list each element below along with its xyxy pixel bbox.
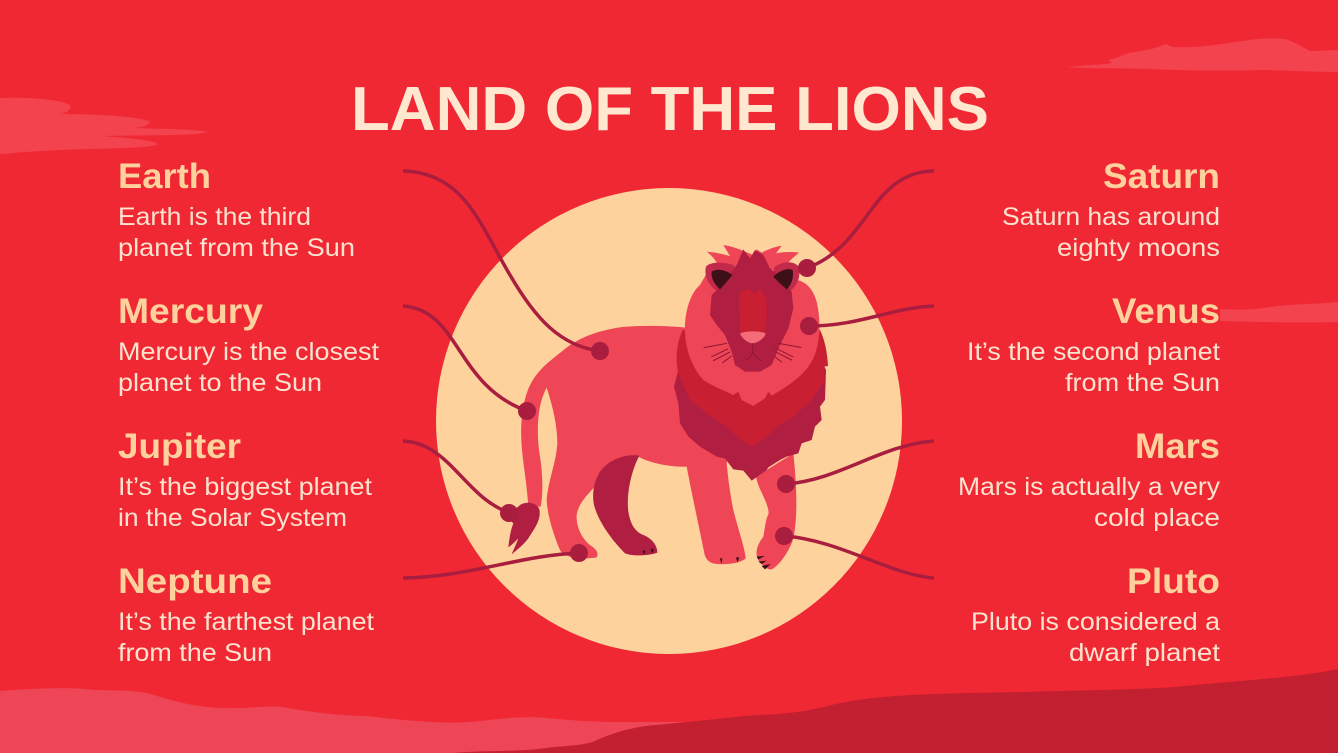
text block: Neptune: from the Sun <box>118 639 272 667</box>
lion: body and tail <box>521 326 746 564</box>
text block: Pluto: Pluto is considered a <box>971 608 1220 636</box>
lion: mouth and whiskers <box>704 343 801 363</box>
text block: Mercury: Mercury <box>118 292 264 331</box>
connector lines <box>403 171 934 578</box>
lion: top tuft <box>707 245 799 270</box>
hill: pink <box>0 688 700 753</box>
text block: Mars: Mars <box>1135 427 1220 466</box>
text block: Mercury: Mercury is the closest <box>118 338 379 366</box>
cloud: top right <box>1067 38 1338 72</box>
text block: Mercury <box>118 292 379 397</box>
lion: nose <box>740 331 766 343</box>
text block: Pluto: Pluto <box>1127 562 1220 601</box>
lion: left inner ear <box>712 270 732 289</box>
hill: dark <box>452 669 1338 753</box>
text block: Jupiter: It’s the biggest planet <box>118 473 372 501</box>
lion: face <box>710 249 793 372</box>
connector: Saturn <box>807 171 934 268</box>
text block: Venus: from the Sun <box>1065 369 1220 397</box>
lion: tail tuft <box>508 503 540 554</box>
lion: paw claws <box>643 549 771 569</box>
lion: far foreleg <box>756 453 796 569</box>
text block: Venus <box>967 292 1220 397</box>
connector: Pluto <box>784 536 934 578</box>
text block: Mars: Mars is actually a very <box>958 473 1221 501</box>
text block: Mars: cold place <box>1094 504 1220 532</box>
connector: Mars <box>786 441 934 484</box>
connector: Neptune <box>403 553 580 578</box>
text block: Earth: Earth <box>118 157 211 196</box>
text block: Neptune: It’s the farthest planet <box>118 608 374 636</box>
text block: Pluto: dwarf planet <box>1069 639 1220 667</box>
lion: inner mane <box>685 273 819 406</box>
text block: Venus: It’s the second planet <box>967 338 1220 366</box>
text block: Mars <box>958 427 1221 532</box>
text block: Venus: Venus <box>1112 292 1220 331</box>
cloud: top left <box>0 98 208 154</box>
connector: Mercury <box>403 306 527 411</box>
connector: Jupiter <box>403 441 510 513</box>
text block: Earth: Earth is the third <box>118 203 311 231</box>
lion: outer mane <box>674 313 826 481</box>
cloud: middle right <box>1220 302 1338 322</box>
lion: right ear <box>774 262 799 292</box>
lion: left ear <box>705 263 736 293</box>
lion: right inner ear <box>773 269 793 289</box>
connector dots <box>500 259 818 562</box>
text block: Jupiter: Jupiter <box>118 427 241 466</box>
lion: nose bridge <box>739 288 767 332</box>
lion illustration <box>508 245 828 569</box>
text block: Pluto <box>971 562 1220 667</box>
text block: Jupiter: in the Solar System <box>118 504 347 532</box>
text block: Jupiter <box>118 427 372 532</box>
connector: Earth <box>403 171 600 351</box>
text block: Neptune: Neptune <box>118 562 272 601</box>
text block: Neptune <box>118 562 374 667</box>
text block: Earth: planet from the Sun <box>118 234 355 262</box>
text block: Saturn: eighty moons <box>1057 234 1220 262</box>
text block: Earth <box>118 157 355 262</box>
lion: far hind leg <box>593 455 657 555</box>
sun circle <box>436 188 902 654</box>
text block: Mercury: planet to the Sun <box>118 369 322 397</box>
text block: Saturn: Saturn has around <box>1002 203 1220 231</box>
text block: Saturn: Saturn <box>1103 157 1220 196</box>
text block: Saturn <box>1002 157 1220 262</box>
title: LAND OF THE LIONS <box>351 75 989 144</box>
lion: middle mane <box>677 330 828 447</box>
connector: Venus <box>809 306 934 326</box>
